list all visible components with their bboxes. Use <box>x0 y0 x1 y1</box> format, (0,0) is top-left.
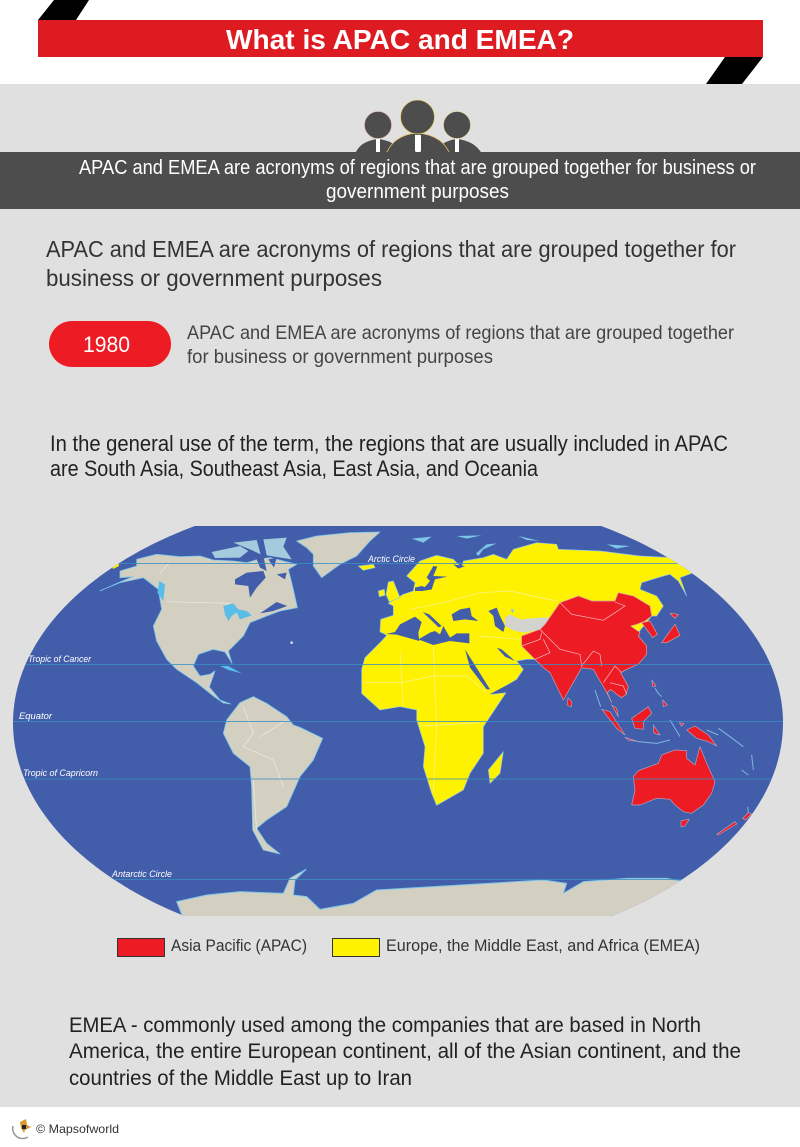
map: Great Lakes and Caribbean <box>157 581 293 673</box>
text block: EMEA: countries of the Middle East up to Iran <box>69 1066 412 1090</box>
legend: APAC: Asia Pacific (APAC) <box>171 936 307 955</box>
map: Alaska highlight <box>112 564 119 569</box>
map: latitude lines <box>0 564 800 880</box>
text block: EMEA: EMEA - commonly used among the companies that are based in North <box>69 1013 701 1037</box>
map: latitude labels: Arctic Circle <box>367 554 415 565</box>
legend: EMEA: Europe, the Middle East, and Africa (EMEA) <box>386 936 700 955</box>
text block: 1980 note <box>187 322 734 368</box>
map: latitude labels: Equator <box>19 711 53 722</box>
map: Sri Lanka <box>567 698 572 707</box>
year pill: 1980: 1980 <box>83 332 130 357</box>
map: Arctic islands <box>212 538 292 559</box>
map: borders in Africa and Europe <box>363 591 557 793</box>
map: mainland APAC <box>522 593 680 703</box>
map: Antarctica <box>177 869 720 918</box>
map: latitude labels: Tropic of Capricorn <box>23 768 98 779</box>
text block: definition: business or government purposes <box>46 265 382 291</box>
text block: EMEA <box>69 1013 741 1090</box>
icon: Mapsofworld logo <box>13 1119 31 1139</box>
footer: Mapsofworld credit: © Mapsofworld <box>36 1122 119 1136</box>
text block: 1980 note: for business or government purposes <box>187 346 493 368</box>
footer: Mapsofworld credit <box>13 1119 119 1139</box>
icon: three business people <box>355 100 482 157</box>
text block: APAC regions: In the general use of the term, the regions that are usually included in APAC <box>50 431 728 456</box>
map: latitude labels: Antarctic Circle <box>111 869 172 880</box>
intro band: government purposes <box>326 180 509 203</box>
legend <box>118 936 700 956</box>
title banner: What is APAC and EMEA? <box>226 24 574 55</box>
map: borders in the Americas <box>160 562 287 830</box>
map: South America <box>223 697 323 854</box>
legend: APAC <box>118 936 307 956</box>
map: latitude labels: Tropic of Cancer <box>28 654 92 665</box>
year pill: 1980 <box>49 321 171 367</box>
map: inland seas <box>386 564 520 694</box>
map: latitude labels <box>19 554 415 880</box>
map: Arctic Eurasian islands <box>412 535 630 613</box>
text block: APAC regions <box>50 431 728 481</box>
intro band <box>0 152 800 209</box>
text block: 1980 note: APAC and EMEA are acronyms of regions that are grouped together <box>187 322 734 344</box>
text block: definition: APAC and EMEA are acronyms of regions that are grouped together for <box>46 236 736 262</box>
title banner <box>38 0 763 84</box>
map: Hudson Bay and Atlantic inlets <box>235 556 287 613</box>
map: Central Asia <box>505 614 553 633</box>
map: EMEA region <box>358 543 693 805</box>
map: Pacific island chains <box>595 688 753 813</box>
map: North America <box>100 532 380 704</box>
world map <box>0 520 800 920</box>
text block: EMEA: America, the entire European continent, all of the Asian continent, and the <box>69 1039 741 1063</box>
text block: APAC regions: are South Asia, Southeast Asia, East Asia, and Oceania <box>50 456 539 481</box>
text block: definition <box>46 236 736 291</box>
map: APAC islands <box>602 680 752 835</box>
map: borders in APAC <box>522 602 627 694</box>
